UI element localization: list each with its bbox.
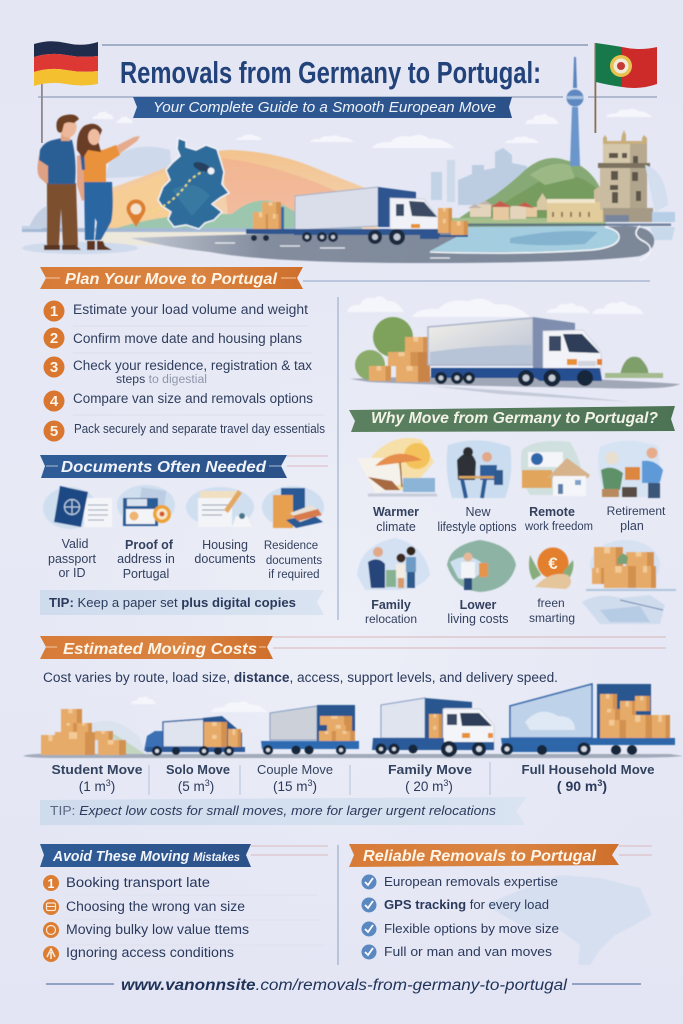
step 2 — [44, 328, 302, 348]
icon: euro coin — [529, 548, 575, 625]
step 3: 3 — [50, 359, 58, 376]
icon: family relocation: relocation — [365, 612, 417, 626]
step 4: 4 — [50, 393, 59, 410]
panel: documents — [40, 455, 328, 615]
label: housing: Housing — [202, 538, 248, 552]
panel: avoid mistakes — [40, 844, 328, 962]
family truck — [372, 698, 494, 757]
step 3: Check your residence, registration & tax — [73, 358, 312, 373]
label: couple move: (15 m — [273, 779, 308, 794]
heading: why move — [349, 406, 675, 432]
right hill and city — [431, 148, 606, 228]
label: residence: if required — [268, 569, 320, 581]
woman — [77, 124, 140, 250]
subtitle ribbon: Your Complete Guide to a Smooth European Move — [153, 99, 496, 116]
icon: lower living costs: living costs — [447, 612, 509, 626]
step 1 — [44, 300, 308, 322]
icon: retirement plan: plan — [620, 519, 644, 533]
label: student move: 3 — [106, 778, 111, 788]
cost description: Cost varies by route, load size, distance, access, support levels, and delivery speed. — [43, 670, 558, 685]
label: residence: Residence — [264, 540, 318, 552]
Belem tower — [537, 130, 675, 222]
label: housing: documents — [194, 552, 256, 566]
step 4 — [44, 390, 313, 412]
icon: retirement plan: Retirement — [607, 504, 666, 518]
icon: lifestyle options: lifestyle options — [438, 520, 516, 534]
step 2: 2 — [50, 330, 58, 347]
map watermark — [485, 875, 652, 965]
label: passport: Valid — [62, 537, 88, 551]
label: student move: (1 m — [79, 779, 106, 794]
label: passport: or ID — [58, 566, 86, 580]
step 3: steps to digestial — [116, 374, 207, 386]
cost illustrations — [23, 684, 683, 758]
German flag — [34, 41, 98, 143]
heading: documents — [40, 455, 287, 478]
heading: costs: Estimated Moving Costs — [63, 641, 257, 658]
mistake 1: Booking transport late — [66, 875, 210, 890]
step 4: Compare van size and removals options — [73, 391, 313, 406]
label: student move — [52, 763, 143, 794]
benefit 3: Flexible options by move size — [384, 921, 559, 936]
step 1: 1 — [50, 303, 58, 320]
step 2: Confirm move date and housing plans — [73, 331, 302, 346]
header flags and title — [34, 41, 657, 143]
icon: lower living costs: Lower — [460, 598, 497, 612]
icon: warmer climate — [357, 438, 437, 534]
label: couple move — [257, 763, 333, 794]
icon: lower living costs — [447, 540, 516, 626]
icon: remote work: work freedom — [524, 521, 593, 533]
student load — [41, 709, 126, 755]
solo van — [144, 716, 245, 756]
label: proof of address: Portugal — [123, 567, 169, 581]
full household truck — [501, 684, 675, 756]
heading: reliable: Reliable Removals to Portugal — [363, 848, 597, 865]
title: Removals from Germany to Portugal: — [120, 55, 541, 90]
label: solo move — [166, 763, 230, 794]
label: family move — [388, 763, 472, 794]
label: family move: ) — [448, 779, 453, 794]
label: couple move: ) — [313, 779, 317, 794]
truck illustration — [347, 296, 680, 402]
label: full household move: ( 90 m — [557, 778, 597, 794]
step 5: 5 — [50, 423, 58, 440]
label: student move: ) — [111, 779, 115, 794]
map sketch — [582, 595, 665, 624]
icon: retirement plan — [598, 441, 666, 533]
step 5 — [44, 420, 325, 442]
icon: euro coin: freen — [537, 596, 565, 610]
label: solo move: Solo Move — [166, 763, 230, 777]
icon: remote work: Remote — [529, 505, 575, 519]
footer url: www.vanonnsite .com/removals-from-germany-to-portugal — [121, 977, 568, 994]
Portuguese flag — [594, 43, 657, 133]
icon: family relocation: Family — [371, 598, 411, 612]
panel: reliable removals — [349, 844, 652, 965]
benefit 4: Full or man and van moves — [384, 944, 553, 959]
label: full household move: Full Household Move — [522, 763, 655, 777]
label: solo move: ) — [210, 779, 214, 794]
panel: plan your move — [40, 267, 650, 442]
header clouds — [92, 109, 652, 148]
icon: lifestyle options: New — [465, 505, 491, 519]
label: student move: Student Move — [52, 763, 143, 777]
label: couple move: Couple Move — [257, 763, 333, 777]
mistake 3: Moving bulky low value ttems — [66, 922, 249, 937]
icon: packed boxes — [586, 540, 676, 590]
label: proof of address — [117, 538, 175, 581]
mistake 2: Choosing the wrong van size — [66, 899, 245, 914]
man — [38, 114, 81, 250]
label: full household move — [522, 763, 655, 794]
couple truck — [261, 705, 359, 755]
map of Germany with route — [146, 138, 229, 229]
water and road — [22, 224, 675, 263]
panel: why move — [349, 406, 676, 626]
heading: avoid — [40, 844, 251, 867]
rule lines — [38, 45, 657, 97]
label: residence — [264, 540, 322, 581]
heading: why move: Why Move from Germany to Portugal? — [371, 410, 658, 427]
peach hills — [22, 147, 378, 245]
label: proof of address: Proof of — [125, 538, 174, 552]
heading: plan: Plan Your Move to Portugal — [65, 271, 278, 288]
heading: costs — [40, 636, 273, 659]
hero illustration — [22, 57, 675, 263]
tip: documents — [40, 590, 324, 615]
icon: euro coin: € — [548, 554, 558, 573]
label: solo move: 3 — [205, 778, 210, 788]
heading: plan — [40, 267, 303, 289]
TV tower — [566, 57, 584, 166]
tip: documents: TIP: Keep a paper set plus digital copies — [49, 595, 296, 610]
label: full household move: ) — [602, 778, 607, 794]
delivery truck — [246, 187, 468, 245]
label: family move: Family Move — [388, 763, 472, 777]
icon: lifestyle options — [438, 440, 516, 534]
step 5: Pack securely and separate travel day essentials — [74, 422, 325, 436]
label: residence: documents — [266, 555, 322, 567]
mistake 1: 1 — [48, 877, 55, 891]
mistake 4: Ignoring access conditions — [66, 945, 234, 960]
icon: family relocation — [357, 538, 430, 626]
heading: reliable — [349, 844, 619, 867]
label: housing — [194, 538, 256, 566]
icon: remote work — [521, 441, 593, 533]
step 3 — [44, 356, 312, 386]
heading: documents: Documents Often Needed — [61, 459, 267, 476]
step 1: Estimate your load volume and weight — [73, 302, 308, 317]
label: full household move: 3 — [597, 778, 602, 788]
benefit 2: GPS tracking for every load — [384, 897, 549, 912]
location pin — [127, 199, 146, 227]
couple — [38, 114, 140, 250]
tip: costs — [40, 797, 527, 825]
icon: proof of address — [117, 485, 175, 526]
label: family move: ( 20 m — [405, 779, 443, 794]
label: proof of address: address in — [117, 552, 175, 566]
label: solo move: (5 m — [178, 779, 205, 794]
clouds — [347, 296, 644, 317]
tip: costs: TIP: Expect low costs for small moves, more for larger urgent relocations — [50, 804, 496, 818]
icon: euro coin: smarting — [529, 611, 575, 625]
icon: passport — [43, 486, 112, 529]
label: family move: 3 — [443, 778, 448, 788]
icon: warmer climate: Warmer — [373, 505, 419, 519]
benefit 1: European removals expertise — [384, 874, 558, 889]
icon: housing documents — [186, 487, 254, 527]
label: passport: passport — [48, 552, 96, 566]
label: passport — [48, 537, 96, 580]
icon: warmer climate: climate — [376, 520, 416, 534]
panel: estimated costs — [23, 636, 683, 825]
heading: avoid: Avoid These Moving Mistakes — [52, 849, 240, 865]
icon: residence documents — [262, 486, 324, 528]
label: couple move: 3 — [308, 778, 313, 788]
